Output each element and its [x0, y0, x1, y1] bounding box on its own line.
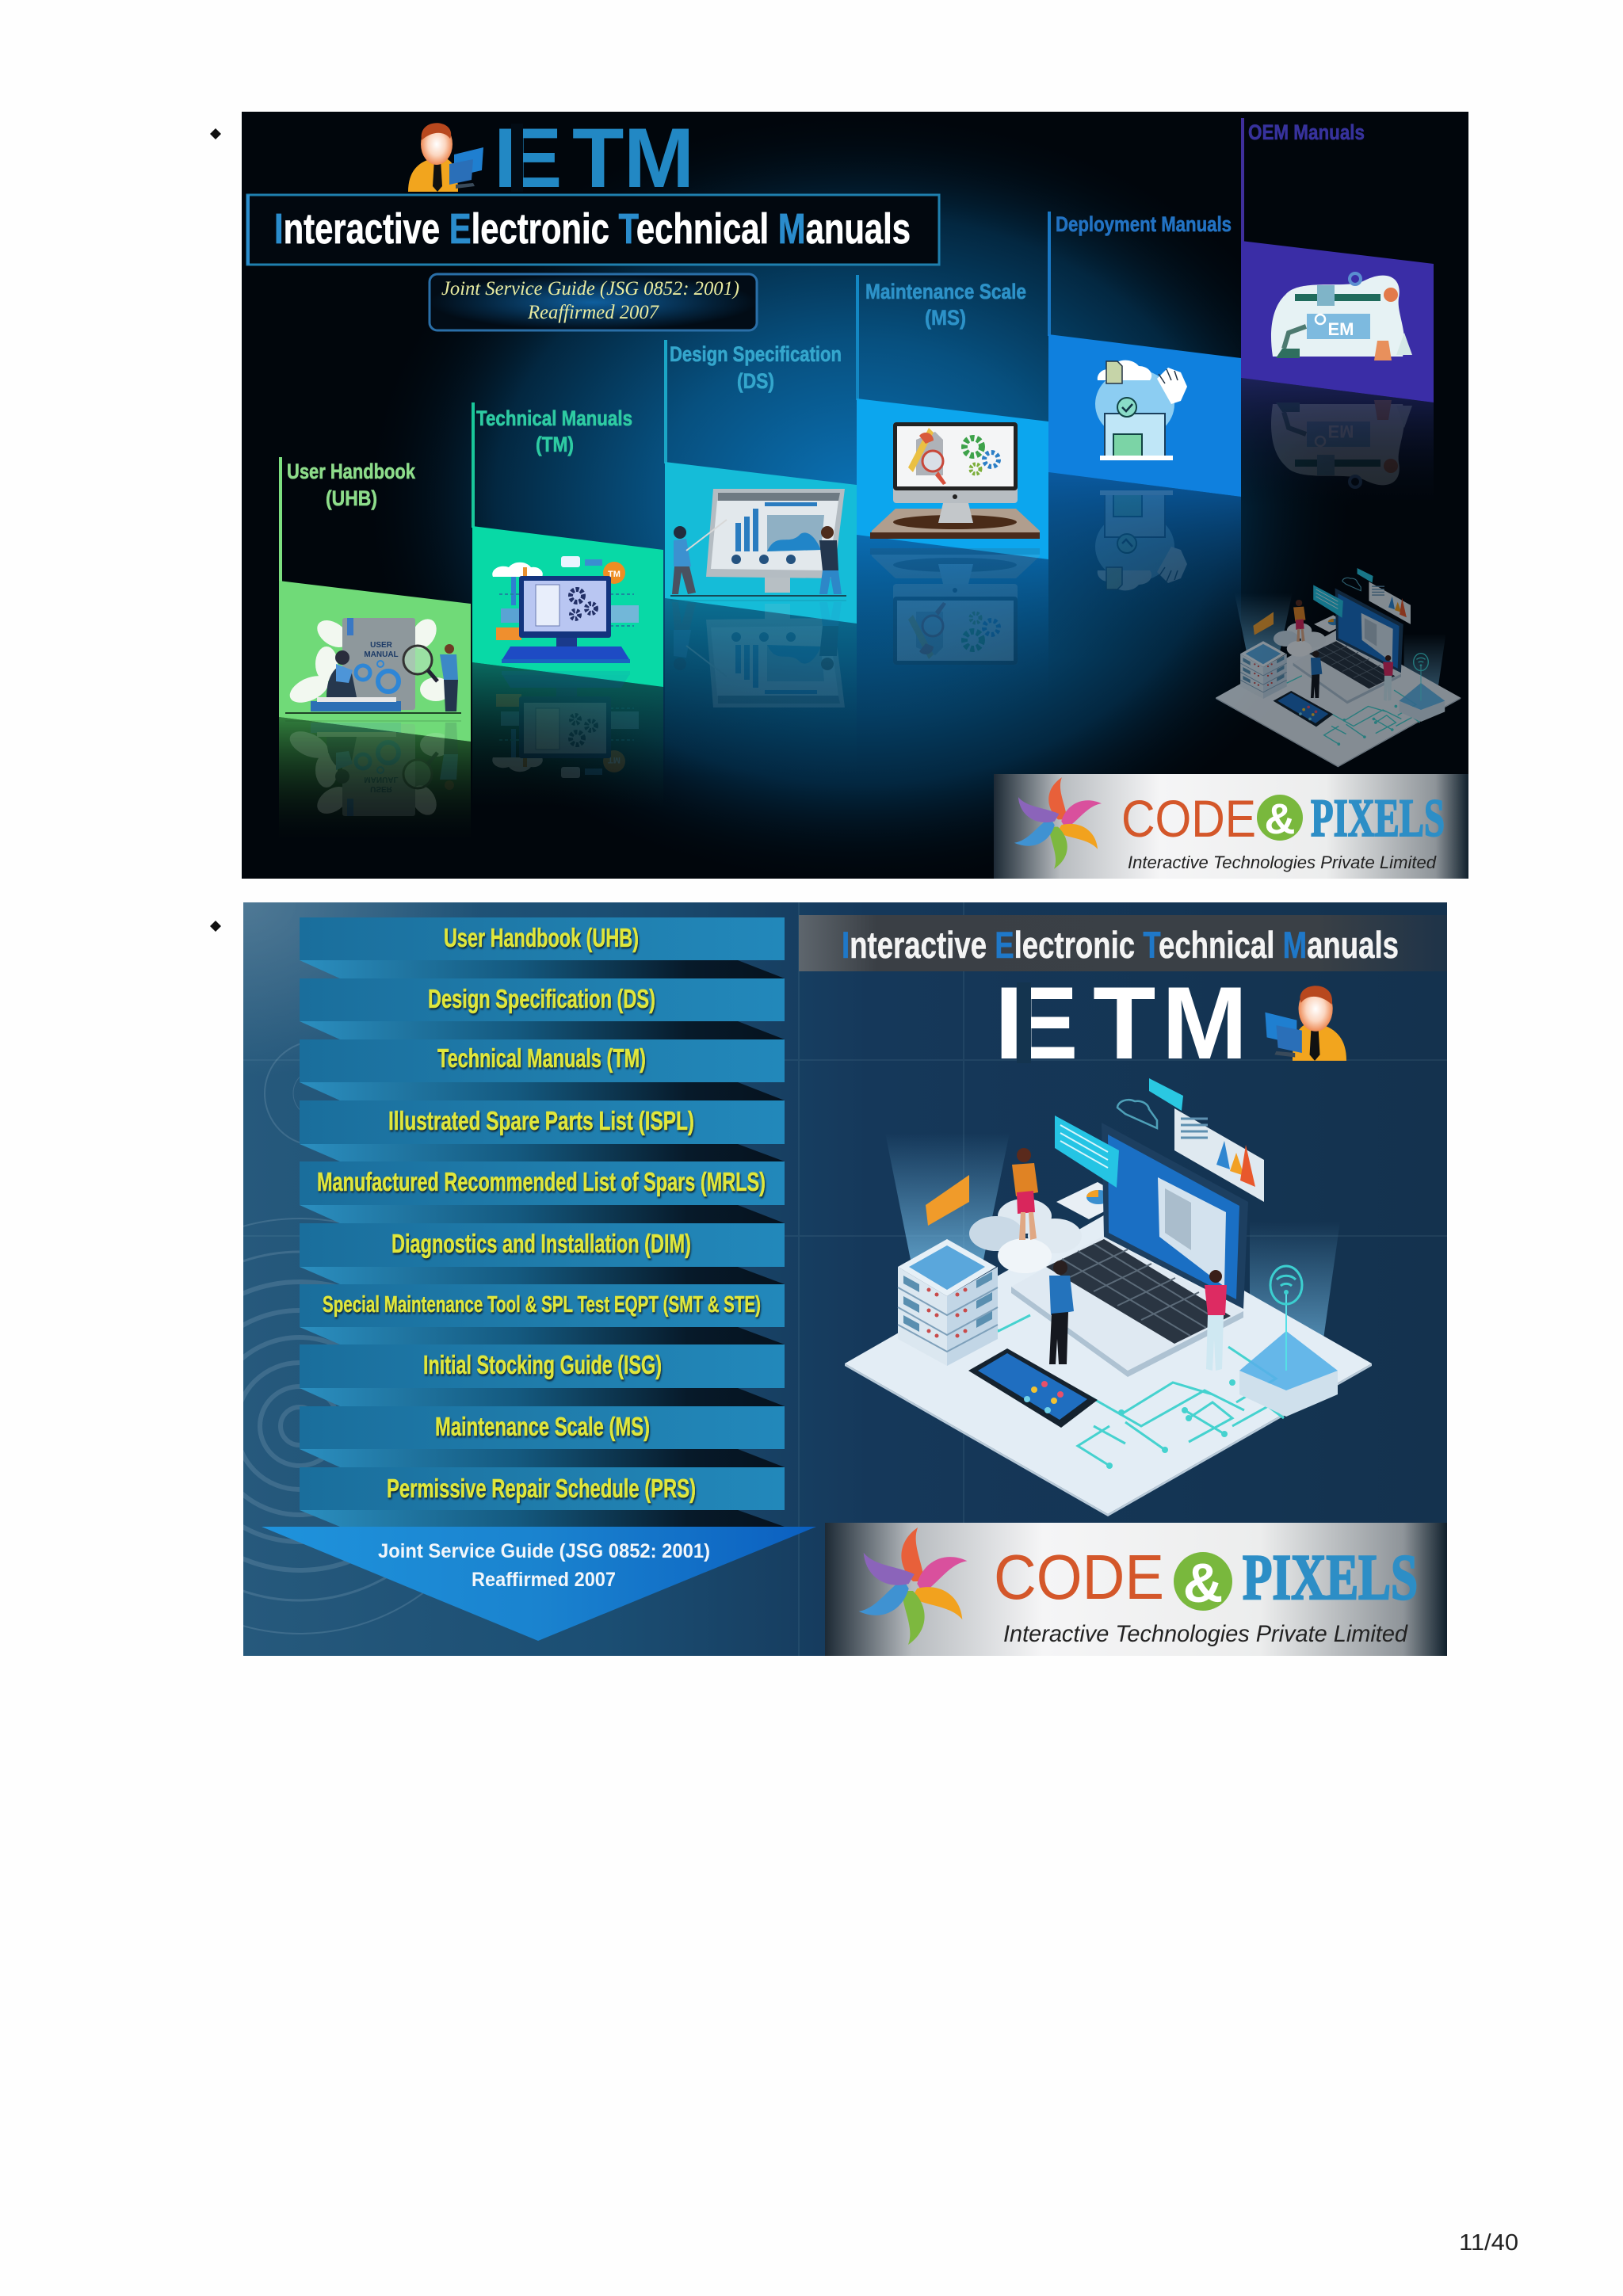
illustration: isometric laptop (dim)	[1216, 568, 1461, 767]
callout: joint service guide: Reaffirmed 2007	[527, 302, 659, 323]
step: User Handbook: User Handbook	[287, 460, 416, 483]
illustration: isometric laptop platform	[845, 1078, 1372, 1516]
step: Maintenance Scale	[856, 275, 1048, 665]
row: Maintenance Scale: Maintenance Scale (MS)	[435, 1412, 650, 1441]
background rings	[243, 1043, 423, 1634]
bullet: second slide	[210, 921, 221, 932]
logo strip: Code & Pixels: CODE	[994, 1542, 1164, 1612]
logo strip: Code & Pixels: CODE	[1121, 789, 1256, 848]
step: Maintenance Scale: Maintenance Scale	[865, 280, 1026, 303]
step: User Handbook	[279, 457, 471, 819]
logo strip: Code & Pixels: &	[1183, 1552, 1223, 1614]
step: Technical Manuals	[472, 402, 663, 778]
title banner: Interactive Electronic Technical Manuals	[274, 205, 911, 253]
step: Design Specification: (DS)	[737, 369, 774, 393]
row: Maintenance Scale	[300, 1406, 785, 1467]
step: OEM Manuals: OEM Manuals	[1248, 120, 1365, 144]
icon: person at computer	[408, 123, 483, 192]
row: Permissive Repair Schedule	[300, 1467, 785, 1527]
row: User Handbook: User Handbook (UHB)	[444, 923, 639, 952]
icon: person at computer (mirrored)	[1265, 986, 1346, 1061]
row: Permissive Repair Schedule: Permissive Repair Schedule (PRS)	[387, 1474, 696, 1503]
row: Manufactured Recommended List of Spars	[300, 1161, 785, 1223]
step: Technical Manuals: Technical Manuals	[476, 406, 632, 430]
title banner	[246, 195, 939, 265]
column reflection shadows	[279, 378, 1434, 841]
row: Initial Stocking Guide: Initial Stocking Guide (ISG)	[423, 1350, 662, 1379]
logo strip: Code & Pixels	[994, 774, 1468, 879]
page number: 11/40	[1459, 2230, 1518, 2256]
panel: IETM document list slide	[243, 902, 1447, 1656]
list of manual types	[300, 917, 785, 1527]
row: Diagnostics and Installation	[300, 1223, 785, 1284]
logo strip: Code & Pixels: Interactive Technologies Private Limited	[1003, 1621, 1408, 1647]
row: Diagnostics and Installation: Diagnostics and Installation (DIM)	[391, 1229, 691, 1258]
step: OEM Manuals	[1241, 118, 1434, 487]
logo: IETM	[499, 128, 689, 187]
step: Deployment Manuals	[1048, 212, 1241, 590]
arrow: joint service guide: Reaffirmed 2007	[472, 1569, 616, 1591]
page canvas	[210, 112, 1518, 2250]
step: Technical Manuals: (TM)	[536, 433, 574, 456]
row: Technical Manuals	[300, 1039, 785, 1100]
row: Technical Manuals: Technical Manuals (TM)	[437, 1043, 646, 1073]
arrow: joint service guide: Joint Service Guide (JSG 0852: 2001)	[378, 1540, 710, 1562]
title strip	[799, 915, 1447, 971]
panel: IETM manual staircase slide	[242, 103, 1468, 895]
row: Illustrated Spare Parts List	[300, 1100, 785, 1161]
step: Deployment Manuals: Deployment Manuals	[1056, 212, 1232, 236]
row: User Handbook	[300, 917, 785, 978]
step: Design Specification	[664, 340, 857, 707]
row: Special Maintenance Tool	[300, 1284, 785, 1344]
title strip: Interactive Electronic Technical Manuals	[842, 924, 1399, 966]
logo: IETM: IETM	[494, 110, 694, 205]
row: Initial Stocking Guide	[300, 1344, 785, 1406]
logo: IETM white: IETM	[995, 965, 1247, 1081]
arrow: joint service guide	[262, 1527, 816, 1641]
logo strip: Code & Pixels: Interactive Technologies Private Limited	[1128, 852, 1437, 872]
step: User Handbook: (UHB)	[326, 486, 377, 510]
logo strip: Code & Pixels: &	[1265, 795, 1295, 843]
logo strip: Code & Pixels	[825, 1523, 1447, 1656]
logo strip: Code & Pixels: PIXELS	[1311, 788, 1445, 848]
callout: joint service guide	[430, 274, 757, 330]
row: Design Specification	[300, 978, 785, 1039]
row: Design Specification: Design Specification (DS)	[428, 984, 655, 1013]
callout: joint service guide: Joint Service Guide (JSG 0852: 2001)	[441, 278, 739, 299]
row: Illustrated Spare Parts List: Illustrated Spare Parts List (ISPL)	[388, 1106, 694, 1135]
step: Maintenance Scale: (MS)	[925, 306, 966, 330]
row: Special Maintenance Tool: Special Maintenance Tool & SPL Test EQPT (SMT & STE)	[323, 1292, 761, 1318]
bullet: first slide	[210, 128, 221, 139]
logo strip: Code & Pixels: PIXELS	[1243, 1541, 1418, 1613]
step: Design Specification: Design Specification	[670, 342, 842, 366]
row: Manufactured Recommended List of Spars: Manufactured Recommended List of Spars (MRLS)	[317, 1167, 766, 1196]
